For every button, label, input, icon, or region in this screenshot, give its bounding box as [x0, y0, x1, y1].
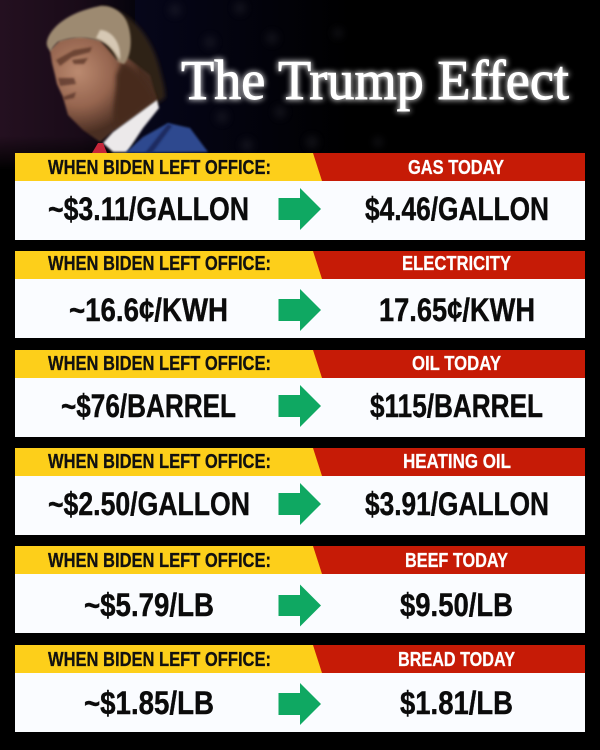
suit: [125, 123, 208, 153]
red header: [313, 153, 585, 181]
value now: $115/BARREL: [370, 388, 543, 424]
white value panel: [15, 181, 585, 240]
label left: WHEN BIDEN LEFT OFFICE:: [48, 648, 271, 671]
value before: ~$2.50/GALLON: [48, 486, 250, 522]
white value panel: [15, 673, 585, 732]
arrow: [278, 683, 321, 725]
label left: WHEN BIDEN LEFT OFFICE:: [48, 450, 271, 473]
yellow header: [15, 546, 325, 574]
value before: ~$1.85/LB: [84, 685, 214, 721]
label right: GAS TODAY: [408, 156, 504, 179]
red header: [313, 350, 585, 378]
arrow: [278, 188, 321, 230]
label right: BREAD TODAY: [398, 648, 515, 671]
face: [50, 36, 157, 142]
label left: WHEN BIDEN LEFT OFFICE:: [48, 352, 271, 375]
value before: ~$3.11/GALLON: [48, 191, 249, 227]
row: heating oil: [15, 448, 585, 535]
label left: WHEN BIDEN LEFT OFFICE:: [48, 252, 271, 275]
red header: [313, 645, 585, 673]
yellow header: [15, 645, 325, 673]
red header: [313, 448, 585, 476]
label right: ELECTRICITY: [402, 252, 511, 275]
value now: $1.81/LB: [400, 685, 513, 721]
row: bread: [15, 645, 585, 732]
value now: 17.65¢/KWH: [379, 292, 535, 328]
photo: portrait: [47, 6, 208, 153]
label right: HEATING OIL: [403, 450, 511, 473]
hair highlight: [96, 30, 120, 60]
yellow header: [15, 251, 325, 279]
yellow header: [15, 350, 325, 378]
label right: BEEF TODAY: [405, 549, 508, 572]
value before: ~16.6¢/KWH: [69, 292, 228, 328]
row: gas: [15, 153, 585, 240]
back of head shadow: [100, 6, 165, 125]
background: [0, 0, 382, 162]
neck and ear shadow: [113, 62, 156, 128]
yellow header: [15, 153, 325, 181]
row: electricity: [15, 251, 585, 338]
value now: $9.50/LB: [400, 587, 513, 623]
hair: [47, 6, 131, 64]
arrow: [278, 483, 321, 525]
red header: [313, 251, 585, 279]
yellow header: [15, 448, 325, 476]
white value panel: [15, 279, 585, 338]
white value panel: [15, 476, 585, 535]
arrow: [278, 584, 321, 626]
brow and eye shadow: [56, 47, 92, 66]
white value panel: [15, 574, 585, 633]
label left: WHEN BIDEN LEFT OFFICE:: [48, 156, 271, 179]
white value panel: [15, 378, 585, 437]
label right: OIL TODAY: [412, 352, 501, 375]
nose and mouth shadow: [58, 78, 76, 100]
title: The Trump Effect: [181, 50, 569, 112]
row: beef: [15, 546, 585, 633]
value before: ~$76/BARREL: [61, 388, 236, 424]
title: The Trump Effect: [181, 50, 569, 112]
lapel shadow: [145, 124, 172, 153]
tie: [92, 143, 107, 153]
collar: [103, 100, 159, 152]
red header: [313, 546, 585, 574]
value before: ~$5.79/LB: [84, 587, 214, 623]
label left: WHEN BIDEN LEFT OFFICE:: [48, 549, 271, 572]
value now: $3.91/GALLON: [365, 486, 549, 522]
arrow: [278, 289, 321, 331]
value now: $4.46/GALLON: [365, 191, 549, 227]
arrow: [278, 385, 321, 427]
row: oil: [15, 350, 585, 437]
